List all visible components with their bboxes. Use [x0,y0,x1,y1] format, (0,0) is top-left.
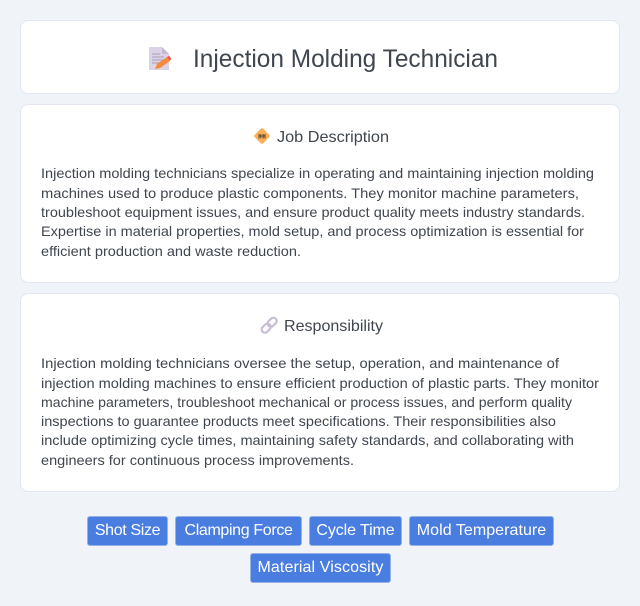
tag: shot size [87,516,168,546]
tag: cycle time: Cycle Time [316,522,395,539]
text block: responsibility [41,355,599,468]
panel: job description card [20,104,620,283]
text block: responsibility: engineers for continuous process improvements. [41,452,354,468]
text block: job description: Injection molding technicians specialize in operating and maintaining injection molding [41,165,594,181]
text block: job description: efficient production and waste reduction. [41,243,301,259]
icon: chain link [260,316,278,334]
tag: mold temperature [409,516,554,546]
tag: cycle time [309,516,402,546]
text block: job description: machines used to produce plastic components. They monitor machine parameters, [41,185,579,201]
icon: orange diamond [254,128,270,144]
tag: shot size: Shot Size [95,522,160,539]
icon: document with pencil [149,47,172,70]
heading: responsibility: Responsibility [284,318,383,335]
panel: responsibility card [20,293,620,492]
heading: job description: Job Description [277,129,389,146]
text block: responsibility: Injection molding technicians oversee the setup, operation, and maintenance of [41,355,559,371]
text block: responsibility: injection molding machines to ensure efficient production of plastic parts. They monitor [41,375,599,391]
text block: responsibility: machine parameters, troubleshoot mechanical or process issues, and perform quality [41,394,572,410]
tag: mold temperature: Mold Temperature [417,522,546,539]
text block: responsibility: inspections to guarantee products meet specifications. Their responsibilities also [41,413,556,429]
tag: clamping force [175,516,302,546]
tag: material viscosity [250,553,391,583]
tag: clamping force: Clamping Force [184,522,293,539]
text block: job description: Expertise in material properties, mold setup, and process optimization is essential for [41,223,584,239]
panel: title card [20,20,620,94]
title: Injection Molding Technician [193,45,498,73]
tag: material viscosity: Material Viscosity [258,559,384,576]
text block: job description: troubleshoot equipment issues, and ensure product quality meets industry standards. [41,204,585,220]
text block: job description [41,165,594,259]
text block: responsibility: include optimizing cycle times, maintaining safety standards, and collaborating with [41,432,574,448]
